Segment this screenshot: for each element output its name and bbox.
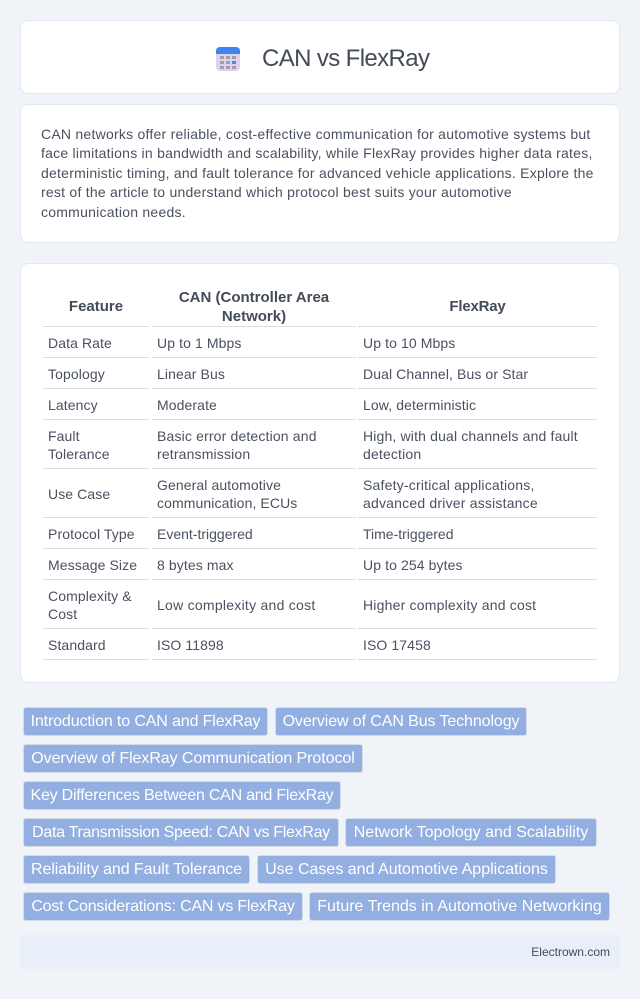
- title: CAN vs FlexRay: [262, 45, 429, 72]
- tag: Cost Considerations: CAN vs FlexRay: [31, 898, 295, 915]
- comparison table card: Dual Channel, Bus or Star: [363, 366, 528, 382]
- tag: [23, 744, 363, 773]
- comparison table card: Low, deterministic: [363, 397, 476, 413]
- tag: [23, 781, 341, 810]
- row: Latency: [48, 397, 476, 413]
- tag: Use Cases and Automotive Applications: [265, 861, 548, 878]
- comparison table card: ISO 17458: [363, 637, 431, 653]
- tag: [345, 818, 597, 847]
- comparison table card: Event-triggered: [157, 526, 253, 542]
- row: Latency: Latency: [48, 397, 98, 413]
- tag: Key Differences Between CAN and FlexRay: [31, 787, 333, 804]
- comparison table card: Low complexity and cost: [157, 597, 316, 613]
- comparison table card: Safety-critical applications,: [363, 477, 535, 493]
- comparison table card: Linear Bus: [157, 366, 225, 382]
- comparison table card: High, with dual channels and fault: [363, 428, 578, 444]
- icon: calendar: [216, 47, 240, 71]
- tag: Reliability and Fault Tolerance: [31, 861, 242, 878]
- row: Protocol Type: Protocol Type: [48, 526, 135, 542]
- intro text: rest of the article to understand which protocol best suits your automotive: [41, 184, 512, 200]
- row: Complexity & Cost: Complexity &: [48, 588, 132, 604]
- footer: [20, 935, 620, 969]
- row: Complexity & Cost: [48, 588, 536, 622]
- comparison table card: 8 bytes max: [157, 557, 234, 573]
- comparison table card: [20, 263, 620, 683]
- tag: Future Trends in Automotive Networking: [317, 898, 602, 915]
- row: Use Case: Use Case: [48, 486, 110, 502]
- tag: [23, 855, 250, 884]
- tag: [257, 855, 556, 884]
- comparison table card: communication, ECUs: [157, 495, 297, 511]
- comparison table card: Moderate: [157, 397, 217, 413]
- row: Topology: [48, 366, 528, 382]
- tag: [309, 892, 610, 921]
- comparison table card: Higher complexity and cost: [363, 597, 536, 613]
- comparison table card: Up to 254 bytes: [363, 557, 463, 573]
- intro text: [41, 126, 594, 220]
- table header: CAN: CAN (Controller Area Network): [179, 289, 329, 325]
- row: Fault Tolerance: Fault: [48, 428, 80, 444]
- row: Topology: Topology: [48, 366, 105, 382]
- row: Message Size: [48, 557, 463, 573]
- tag: [23, 707, 268, 736]
- comparison table card: Time-triggered: [363, 526, 454, 542]
- table header: FlexRay: FlexRay: [449, 298, 506, 315]
- row: Use Case: [48, 477, 538, 511]
- row: Protocol Type: [48, 526, 454, 542]
- header card: [20, 20, 620, 94]
- intro text: face limitations in bandwidth and scalability, while FlexRay provides higher data rates,: [41, 145, 593, 161]
- footer text: Electrown.com: [531, 945, 610, 959]
- row: Complexity & Cost: Cost: [48, 606, 77, 622]
- comparison table card: Basic error detection and: [157, 428, 317, 444]
- tag: Data Transmission Speed: CAN vs FlexRay: [32, 824, 330, 841]
- tag: [275, 707, 527, 736]
- tag: Overview of FlexRay Communication Protocol: [31, 750, 355, 767]
- comparison table card: retransmission: [157, 446, 250, 462]
- comparison table card: Up to 10 Mbps: [363, 335, 455, 351]
- row: Data Rate: Data Rate: [48, 335, 112, 351]
- row: Fault Tolerance: [48, 428, 578, 462]
- intro card: [20, 104, 620, 243]
- comparison table card: Up to 1 Mbps: [157, 335, 241, 351]
- row: Fault Tolerance: Tolerance: [48, 446, 110, 462]
- tag list: [23, 707, 610, 921]
- tag: Introduction to CAN and FlexRay: [31, 713, 260, 730]
- comparison table card: detection: [363, 446, 421, 462]
- row: Standard: Standard: [48, 637, 106, 653]
- intro text: communication needs.: [41, 204, 186, 220]
- tag: [23, 818, 339, 847]
- intro text: CAN networks offer reliable, cost-effective communication for automotive systems but: [41, 126, 591, 142]
- row: Message Size: Message Size: [48, 557, 137, 573]
- row: Data Rate: [48, 335, 455, 351]
- row: Standard: [48, 637, 431, 653]
- table header: Feature: Feature: [69, 298, 123, 315]
- tag: [23, 892, 303, 921]
- tag: Network Topology and Scalability: [354, 824, 588, 841]
- comparison table card: General automotive: [157, 477, 281, 493]
- tag: Overview of CAN Bus Technology: [283, 713, 519, 730]
- intro text: deterministic timing, and fault tolerance for advanced vehicle applications. Explore the: [41, 165, 594, 181]
- comparison table card: advanced driver assistance: [363, 495, 538, 511]
- comparison table card: ISO 11898: [157, 637, 224, 653]
